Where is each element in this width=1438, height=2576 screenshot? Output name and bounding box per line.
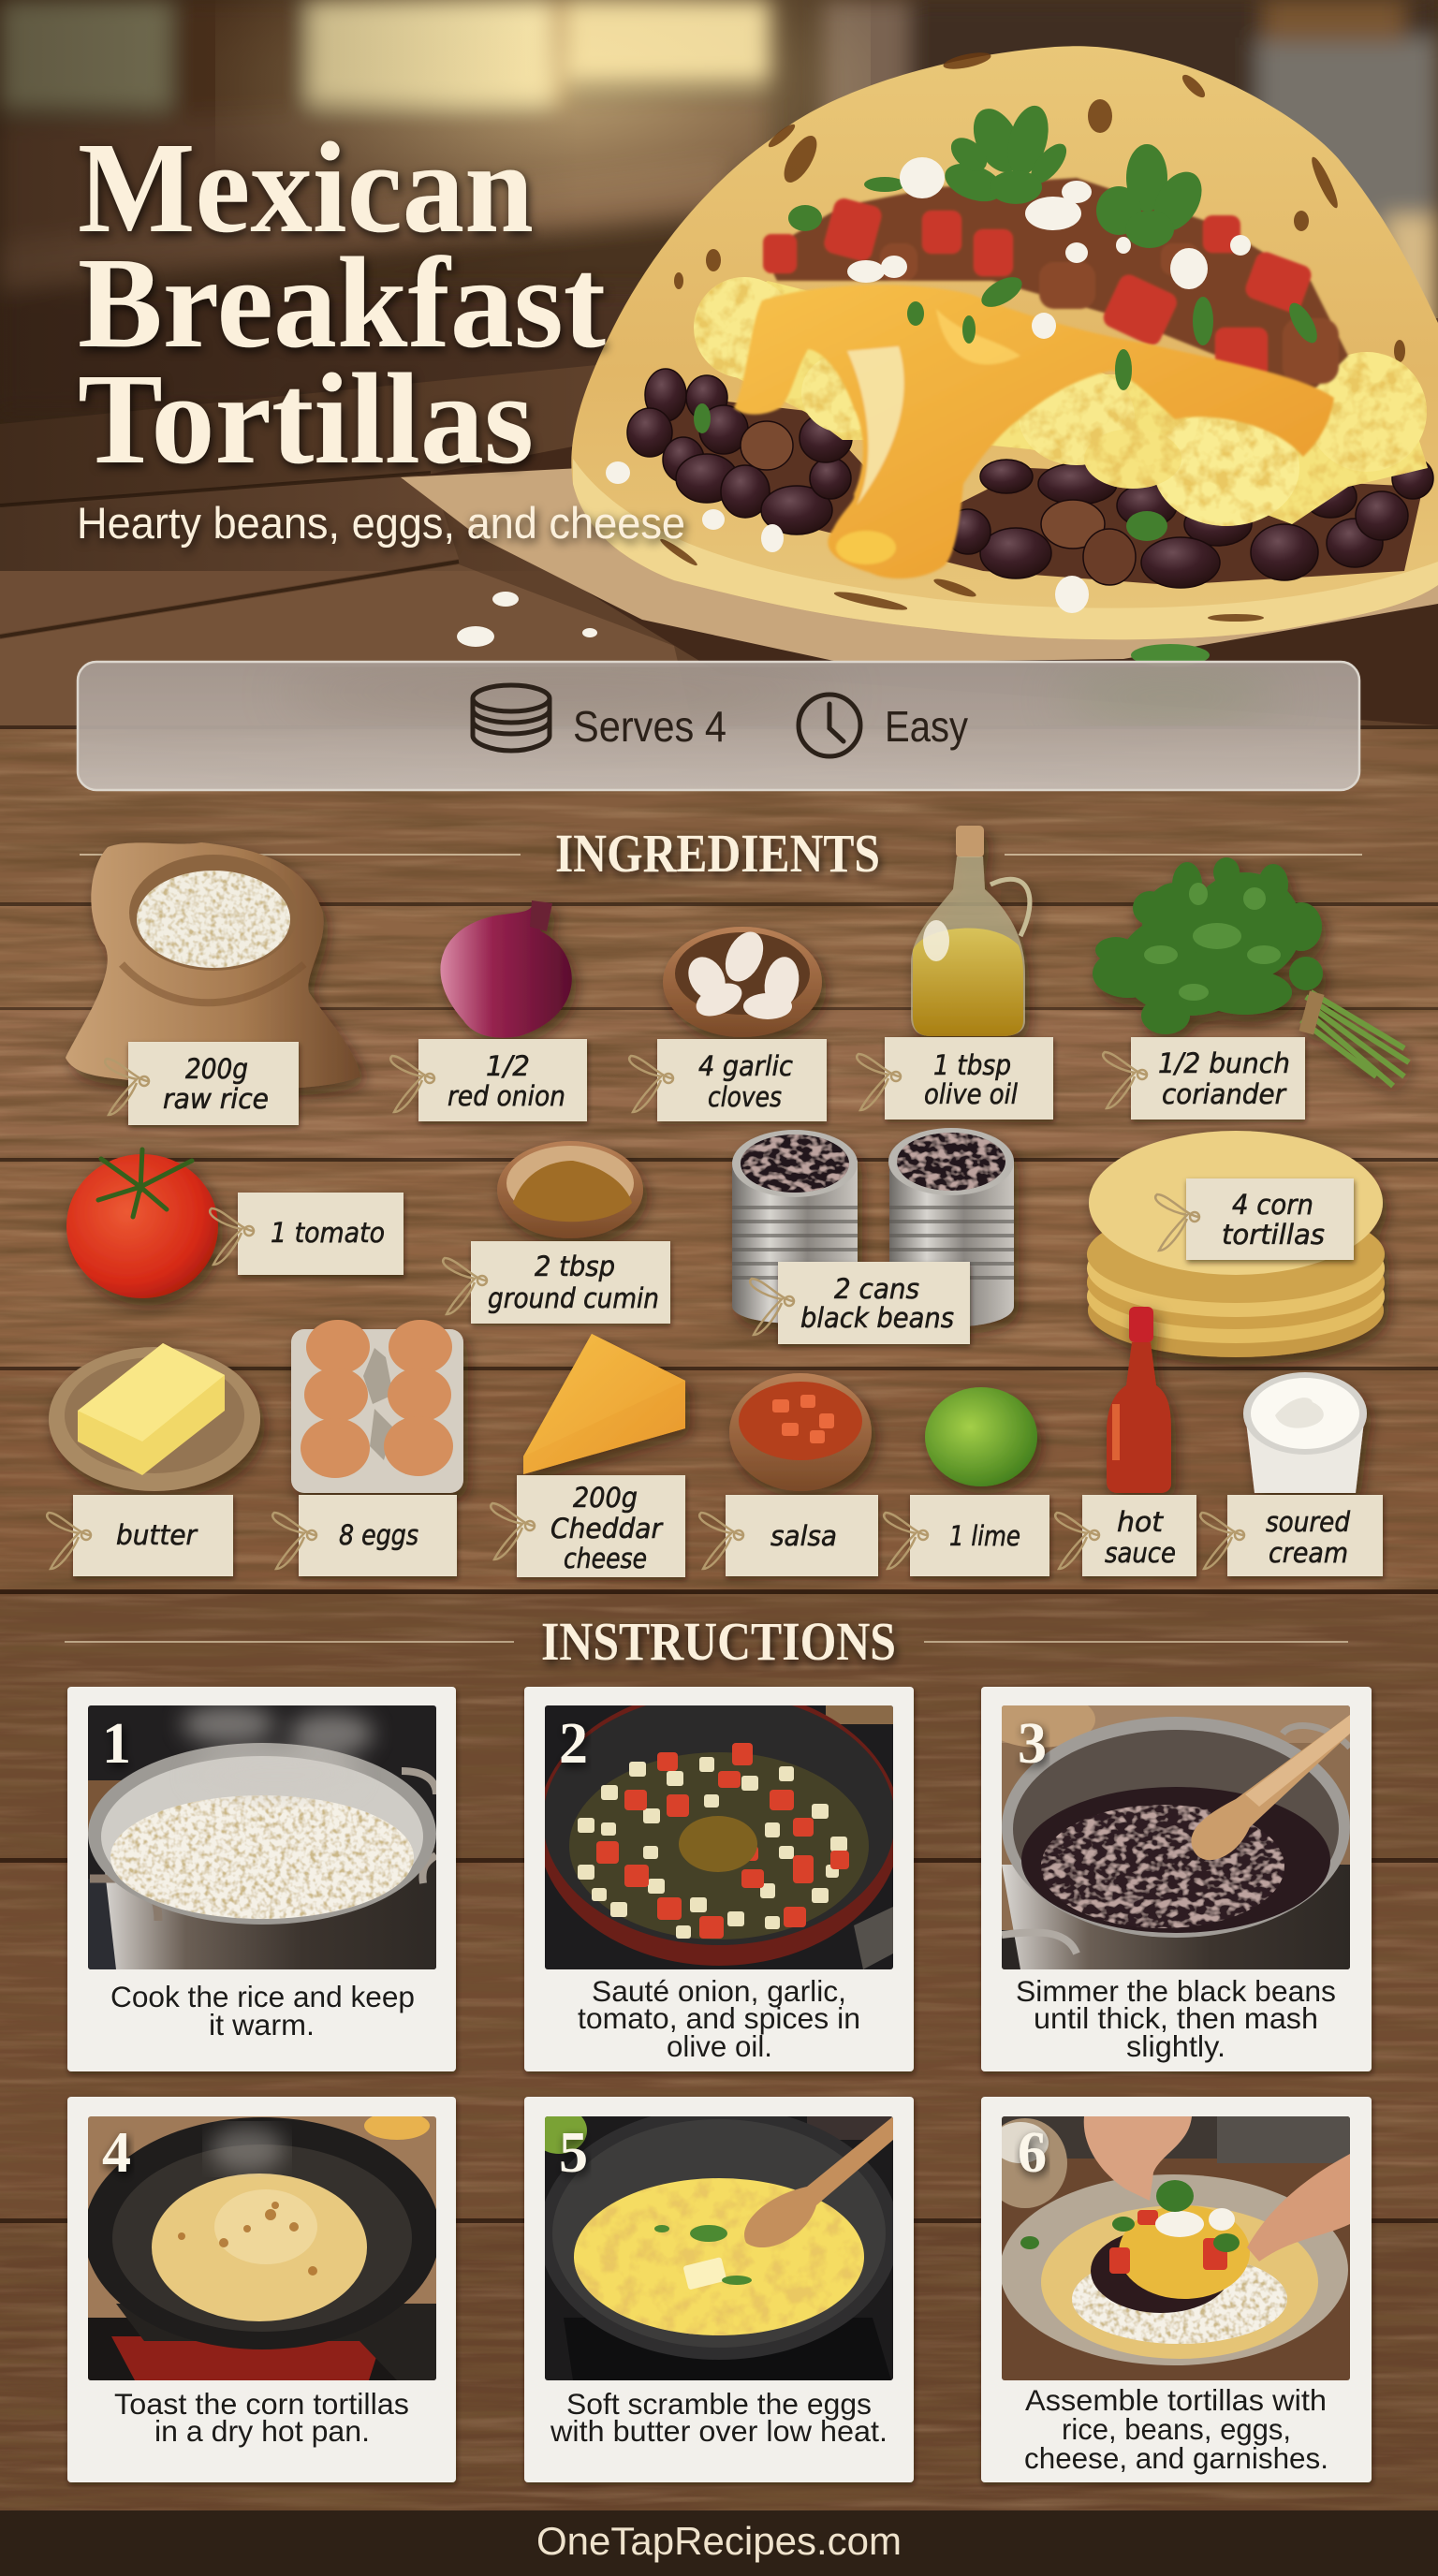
servings label: Serves 4 — [573, 702, 726, 751]
cans of black beans — [732, 1128, 1014, 1327]
step card 4 — [67, 2097, 456, 2482]
panel blur shading — [281, 672, 1283, 721]
tag: coriander: coriander — [1162, 1078, 1287, 1110]
step 2 text — [578, 1974, 860, 2063]
tag: hot sauce: sauce — [1105, 1537, 1176, 1569]
tag: cumin: ground cumin — [488, 1282, 659, 1314]
tag: soured cream: cream — [1269, 1537, 1348, 1569]
tag: rice: 200g — [185, 1053, 248, 1085]
hero photo — [0, 0, 1438, 725]
hot sauce bottle — [1107, 1307, 1171, 1493]
salsa — [763, 178, 1348, 393]
step 4 text: Toast the corn tortillas — [114, 2387, 409, 2421]
tag: eggs: 8 eggs — [339, 1519, 418, 1551]
step number 1: 1 — [102, 1712, 131, 1776]
butter on plate — [49, 1343, 260, 1491]
tag: butter: butter — [116, 1519, 198, 1551]
step card 5 — [524, 2097, 914, 2482]
tortilla — [571, 46, 1438, 639]
tag: corn tortillas: tortillas — [1222, 1219, 1325, 1251]
title: Tortillas — [78, 347, 534, 491]
parchment and board — [403, 431, 1438, 725]
step 6 text — [1024, 2383, 1328, 2475]
step number 2: 2 — [559, 1712, 588, 1776]
tag: eggs — [272, 1495, 457, 1576]
queso fresco crumbs — [457, 157, 1251, 647]
step 3 text: until thick, then mash — [1034, 2001, 1318, 2035]
tag: salsa — [699, 1495, 878, 1576]
tag: soured cream — [1200, 1495, 1383, 1576]
tag: hot sauce — [1055, 1495, 1196, 1576]
step 1 text — [110, 1980, 415, 2042]
step 4 photo: tortilla in skillet — [84, 2112, 440, 2380]
tag: rice: raw rice — [163, 1083, 269, 1115]
step 2 photo: saute pan — [537, 1689, 901, 1969]
tag: cheddar: 200g — [573, 1482, 638, 1514]
tag: cheddar: cheese — [564, 1543, 647, 1574]
step 4 text — [114, 2387, 409, 2448]
step 3 text: slightly. — [1126, 2029, 1225, 2063]
step 3 text — [1016, 1974, 1336, 2063]
ingredients heading: INGREDIENTS — [555, 823, 880, 884]
tag: red onion: red onion — [448, 1080, 565, 1112]
tag: cheddar — [491, 1475, 685, 1577]
step number 6: 6 — [1018, 2121, 1047, 2185]
step 5 text: Soft scramble the eggs — [566, 2387, 872, 2421]
tag: lime — [884, 1495, 1049, 1576]
tag: coriander — [1103, 1037, 1305, 1120]
step 1 text: Cook the rice and keep — [110, 1980, 415, 2013]
icon: clock — [799, 695, 860, 756]
tag: red onion: 1/2 — [486, 1050, 530, 1082]
tag: olive oil: olive oil — [924, 1078, 1018, 1110]
stack of corn tortillas — [1087, 1131, 1385, 1357]
step card 2 — [524, 1687, 914, 2071]
tomato — [66, 1149, 218, 1298]
tag: butter — [47, 1495, 233, 1576]
title: Mexican — [78, 116, 534, 260]
tag: garlic — [629, 1039, 827, 1121]
window background — [0, 0, 1438, 412]
table — [0, 318, 1438, 725]
egg carton — [291, 1320, 463, 1493]
step card 6 — [981, 2097, 1372, 2482]
ingredient illustrations — [49, 826, 1409, 1493]
title: Breakfast — [78, 231, 606, 375]
black beans — [627, 369, 1433, 588]
tag: tomato — [210, 1193, 404, 1275]
step 1 photo: pot of rice — [88, 1705, 436, 1969]
tag: garlic: cloves — [708, 1081, 782, 1113]
difficulty label: Easy — [885, 702, 968, 751]
step 1 text: it warm. — [209, 2008, 315, 2042]
info panel — [78, 662, 1359, 790]
step number 3: 3 — [1018, 1712, 1047, 1776]
step card 3 — [981, 1687, 1372, 2071]
step 6 photo: assembling tortilla — [983, 2116, 1350, 2380]
garlic bowl — [663, 926, 822, 1037]
cumin bowl — [497, 1141, 643, 1238]
green leaf bottom — [1131, 644, 1210, 666]
tag: hot sauce: hot — [1117, 1506, 1165, 1538]
step 5 text: with butter over low heat. — [550, 2414, 888, 2448]
instructions heading: INSTRUCTIONS — [541, 1611, 896, 1672]
footer bar — [0, 2510, 1438, 2576]
tag: cumin — [443, 1241, 670, 1324]
step 5 text — [550, 2387, 888, 2448]
tag: corn tortillas: 4 corn — [1232, 1189, 1313, 1221]
tag: soured cream: soured — [1266, 1506, 1351, 1538]
wood background — [0, 725, 1438, 2576]
scrambled eggs — [694, 277, 1428, 526]
tag: garlic: 4 garlic — [698, 1050, 793, 1082]
icon: stack of plates — [473, 685, 550, 751]
tag: olive oil: 1 tbsp — [933, 1049, 1011, 1081]
step 5 photo: scrambled eggs — [531, 2107, 899, 2380]
tag: olive oil — [857, 1037, 1053, 1120]
coriander garnish — [694, 101, 1323, 541]
subtitle: Hearty beans, eggs, and cheese — [77, 498, 685, 548]
step 2 text: olive oil. — [667, 2029, 772, 2063]
tag: black beans: 2 cans — [834, 1273, 919, 1305]
tag: black beans: black beans — [800, 1302, 954, 1334]
lime — [925, 1387, 1037, 1486]
tag: tomato: 1 tomato — [271, 1217, 385, 1249]
melted cheese — [734, 285, 1334, 578]
tag: coriander: 1/2 bunch — [1158, 1047, 1290, 1079]
tag: red onion — [390, 1039, 587, 1121]
ingredient tags — [47, 1037, 1383, 1577]
step 3 text: Simmer the black beans — [1016, 1974, 1336, 2008]
step 4 text: in a dry hot pan. — [154, 2414, 370, 2448]
tag: salsa: salsa — [770, 1520, 837, 1552]
red onion — [440, 900, 572, 1038]
soured cream tub — [1243, 1372, 1367, 1493]
title — [78, 116, 606, 491]
step number 5: 5 — [559, 2121, 588, 2185]
step 3 photo: pot of beans — [983, 1691, 1350, 1969]
step 6 text: rice, beans, eggs, — [1062, 2412, 1291, 2446]
step 2 text: tomato, and spices in — [578, 2001, 860, 2035]
tag: rice — [105, 1042, 299, 1125]
step 6 text: cheese, and garnishes. — [1024, 2441, 1328, 2475]
step number 4: 4 — [102, 2121, 131, 2185]
step 6 text: Assemble tortillas with — [1025, 2383, 1327, 2417]
tag: cumin: 2 tbsp — [535, 1251, 615, 1282]
footer website text: OneTapRecipes.com — [536, 2519, 902, 2563]
step 2 text: Sauté onion, garlic, — [592, 1974, 846, 2008]
tag: corn tortillas — [1155, 1178, 1354, 1260]
tag: lime: 1 lime — [949, 1520, 1020, 1552]
tag: cheddar: Cheddar — [550, 1513, 664, 1544]
rice sack — [66, 842, 360, 1090]
cheddar wedge — [523, 1334, 685, 1474]
salsa bowl — [729, 1373, 872, 1491]
coriander bunch — [1093, 857, 1409, 1086]
olive oil bottle — [911, 826, 1030, 1036]
step card 1 — [67, 1687, 456, 2071]
tag: black beans — [750, 1262, 970, 1344]
